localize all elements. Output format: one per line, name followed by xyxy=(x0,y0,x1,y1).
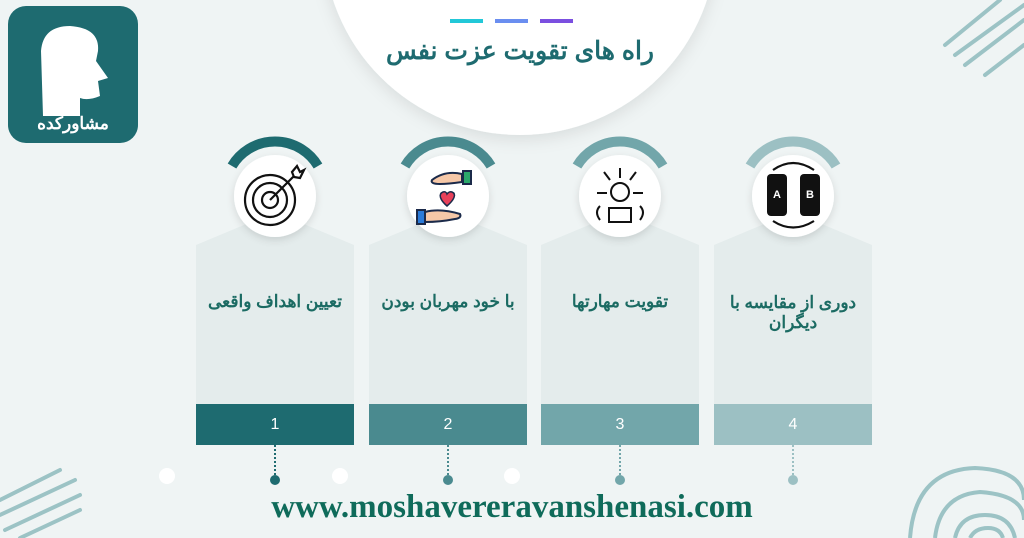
faint white dots xyxy=(159,468,520,484)
title accent bars xyxy=(450,19,573,23)
column 1 panel xyxy=(196,142,354,485)
number 2: 2 xyxy=(444,416,452,433)
label 3: تقویت مهارتها xyxy=(572,292,668,311)
icon: A/B phones xyxy=(767,163,820,228)
icon: person with arrows xyxy=(597,168,643,222)
decorative stripes bottom-left xyxy=(0,470,80,538)
number 3: 3 xyxy=(616,416,624,433)
website url: www.moshavereravanshenasi.com xyxy=(271,489,753,525)
column 4 panel xyxy=(714,142,872,485)
label 1: تعیین اهداف واقعی xyxy=(208,292,342,311)
logo xyxy=(8,6,138,143)
logo: مشاورکده xyxy=(37,114,109,133)
icon: hands with heart xyxy=(417,171,471,224)
title: راه های تقویت عزت نفس xyxy=(386,37,654,65)
label 2: با خود مهربان بودن xyxy=(381,292,515,311)
column 2 panel xyxy=(369,142,527,485)
decorative stripes top-right xyxy=(945,0,1024,75)
icon: target xyxy=(245,166,304,225)
top white circle xyxy=(323,0,717,135)
decorative arcs bottom-right xyxy=(910,468,1024,538)
number 4: 4 xyxy=(789,416,797,433)
icon: A/B phones: B xyxy=(806,189,814,201)
number 1: 1 xyxy=(271,416,279,433)
icon: A/B phones: A xyxy=(773,189,781,201)
label 4 xyxy=(730,293,856,332)
label 4: دیگران xyxy=(769,313,817,332)
label 4: دوری از مقایسه با xyxy=(730,293,856,312)
column 3 panel xyxy=(541,142,699,485)
